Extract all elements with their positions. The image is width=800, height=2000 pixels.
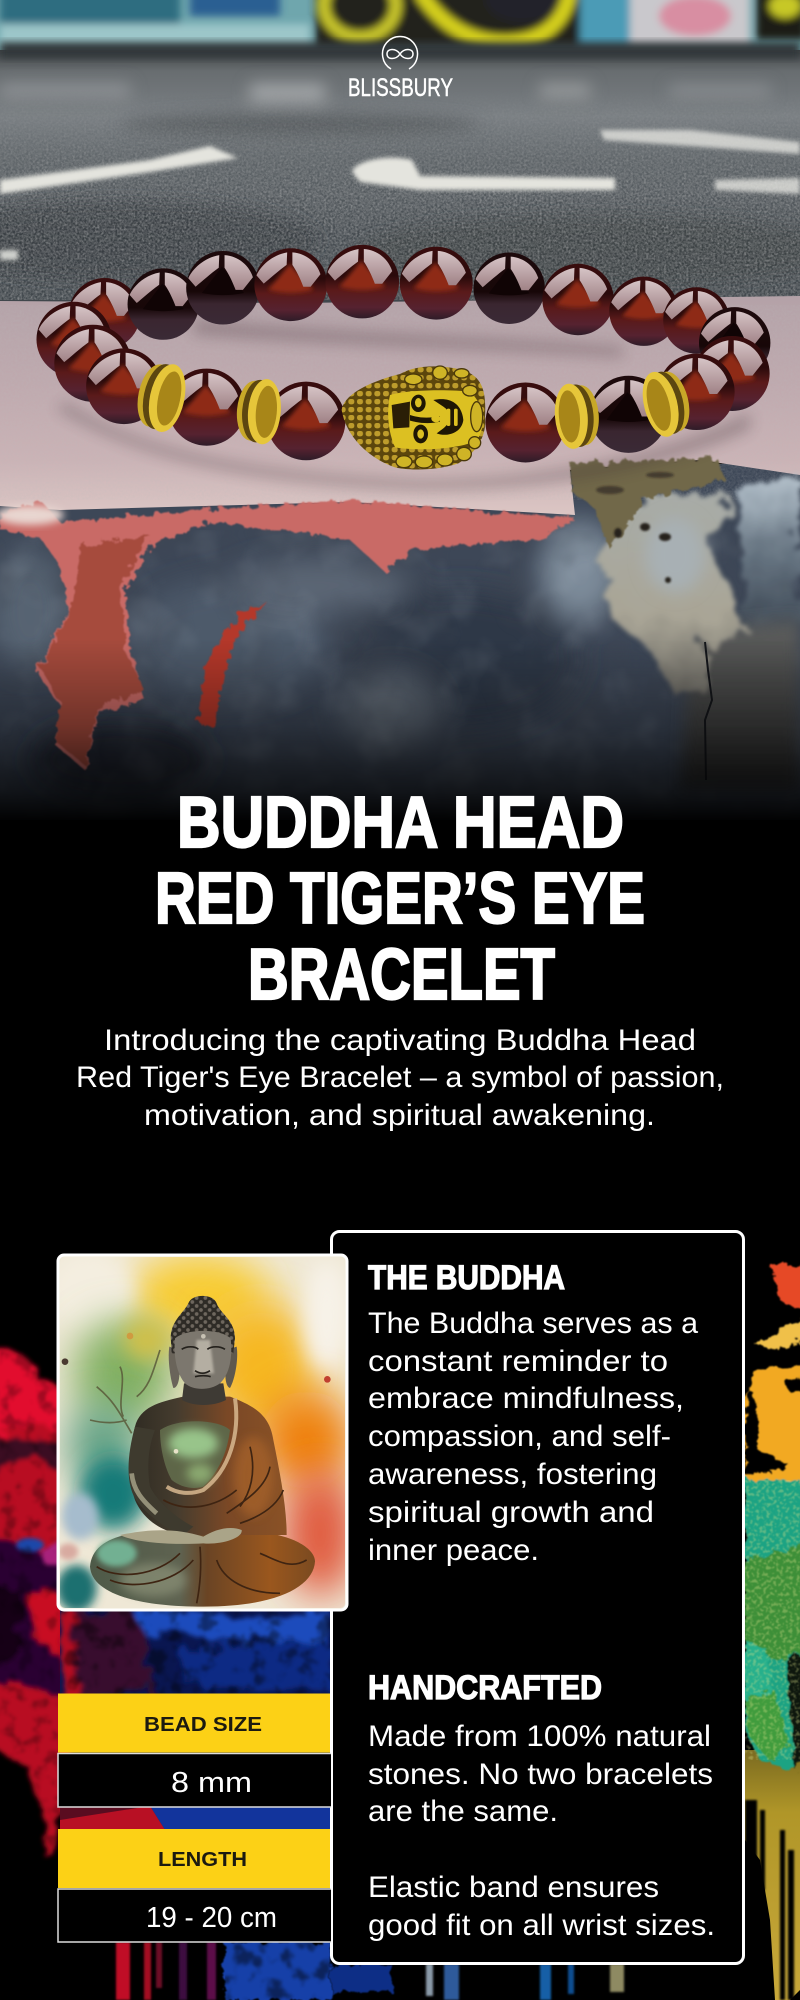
contact shadow <box>56 319 750 490</box>
icon: infinity ring <box>382 36 418 69</box>
logo: Blissbury <box>348 36 453 102</box>
heading: handcrafted: HANDCRAFTED <box>368 1669 602 1707</box>
title <box>155 783 645 1015</box>
intro paragraph: Red Tiger's Eye Bracelet – a symbol of passion, <box>76 1061 724 1094</box>
label: bead size <box>58 1694 330 1752</box>
title: RED TIGER’S EYE <box>155 859 645 939</box>
robe folds <box>167 1398 236 1493</box>
title: BRACELET <box>248 935 555 1015</box>
right paint: orange, teal and olive drips <box>744 1264 800 2000</box>
text: the Buddha description: embrace mindfulness, <box>368 1382 684 1415</box>
panel: Buddha watercolor picture <box>47 1250 357 1612</box>
face <box>175 1331 231 1389</box>
left red and blue powder cloud <box>0 1340 70 1860</box>
text: the Buddha description: spiritual growth and <box>368 1496 654 1529</box>
white road markings <box>0 130 800 260</box>
torso and robe <box>130 1397 287 1535</box>
label: length <box>58 1829 330 1888</box>
red paint drips <box>0 500 575 770</box>
value: 8 mm: 8 mm <box>171 1767 252 1799</box>
tree branches <box>90 1350 160 1433</box>
value: 8 mm <box>58 1754 331 1807</box>
intro paragraph <box>76 1024 724 1132</box>
text: the Buddha description: compassion, and self- <box>368 1420 671 1453</box>
text: the Buddha description: The Buddha serves as a <box>368 1307 699 1340</box>
text: the Buddha description <box>368 1307 699 1567</box>
chest with green wash <box>160 1421 230 1488</box>
asphalt ground <box>0 50 800 314</box>
rock face <box>0 460 800 820</box>
text: handcrafted description: stones. No two bracelets <box>368 1758 713 1791</box>
arms and hands <box>129 1427 193 1535</box>
text: handcrafted description: are the same. <box>368 1795 558 1828</box>
crumbling concrete edge <box>570 458 800 790</box>
back row of beads <box>69 245 770 411</box>
label: length: LENGTH <box>158 1849 247 1871</box>
text: the Buddha description: inner peace. <box>368 1534 539 1567</box>
intro paragraph: Introducing the captivating Buddha Head <box>104 1024 696 1057</box>
neck <box>182 1383 226 1405</box>
main text card <box>332 1232 744 1964</box>
watercolor washes <box>60 1257 345 1608</box>
label: bead size: BEAD SIZE <box>144 1714 262 1736</box>
bracelet photo <box>36 245 770 490</box>
panel: bead size spec <box>58 1694 331 1807</box>
gold Buddha head bead <box>342 366 485 469</box>
bottom drips <box>116 1942 624 2000</box>
stone slab top <box>0 296 800 515</box>
paint specks <box>62 1333 331 1383</box>
text: the Buddha description: awareness, fostering <box>368 1458 657 1491</box>
text: handcrafted description: Made from 100% natural <box>368 1720 711 1753</box>
text: handcrafted description <box>368 1720 715 1942</box>
brand name: BLISSBURY <box>348 74 453 102</box>
paint splashes behind lower section <box>0 1264 800 2000</box>
seated Buddha figure <box>90 1296 315 1607</box>
heading: the Buddha: THE BUDDHA <box>368 1259 565 1297</box>
front row of beads <box>36 302 735 462</box>
text: handcrafted description: Elastic band ensures <box>368 1871 659 1904</box>
ears <box>169 1347 180 1388</box>
text: the Buddha description: constant reminder to <box>368 1345 668 1378</box>
title: BUDDHA HEAD <box>177 783 624 863</box>
gold spacers <box>132 358 696 450</box>
hero photo: street scene with stone slab <box>0 0 800 830</box>
legs <box>90 1532 315 1607</box>
blue paint below picture <box>60 1610 332 1830</box>
intro paragraph: motivation, and spiritual awakening. <box>144 1099 655 1132</box>
value: 19 - 20 cm: 19 - 20 cm <box>146 1902 277 1934</box>
graffiti wall <box>0 0 800 56</box>
hair <box>171 1296 235 1353</box>
dark fade into black panel <box>0 640 800 830</box>
value: 19 - 20 cm <box>58 1889 331 1942</box>
panel: length spec <box>58 1829 331 1942</box>
text: handcrafted description: good fit on all wrist sizes. <box>368 1909 715 1942</box>
